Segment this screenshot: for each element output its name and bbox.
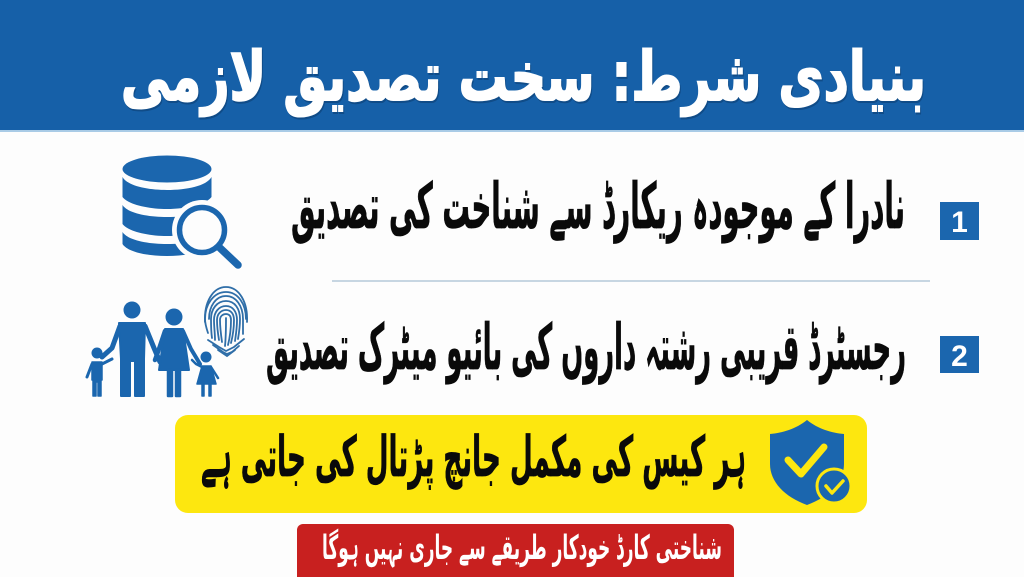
row 1 number badge bbox=[940, 202, 979, 240]
callout text: ہر کیس کی مکمل جانچ پڑتال کی جاتی ہے bbox=[201, 425, 746, 490]
row 2 number badge: 2 bbox=[951, 340, 968, 373]
father bbox=[124, 302, 140, 318]
row 2 number badge bbox=[940, 336, 979, 373]
title: بنیادی شرط: سخت تصدیق لازمی bbox=[121, 39, 926, 117]
icon: database with magnifier bbox=[122, 156, 238, 265]
figures: father, mother, boy, girl bbox=[87, 302, 218, 396]
mother bbox=[166, 308, 182, 326]
icon: fingerprint bbox=[205, 287, 247, 356]
warning: red banner bbox=[297, 524, 734, 577]
row 1 number badge: 1 bbox=[951, 206, 968, 239]
boy bbox=[92, 348, 102, 358]
icon: shield with check bbox=[770, 420, 851, 505]
warning text: شناختی کارڈ خودکار طریقے سے جاری نہیں ہوگا bbox=[322, 528, 722, 568]
header banner bbox=[0, 0, 1024, 132]
girl bbox=[200, 352, 212, 362]
title: بنیادی شرط: سخت تصدیق لازمی bbox=[122, 41, 927, 119]
callout: yellow banner bbox=[175, 415, 867, 513]
icon: family with fingerprint bbox=[87, 287, 247, 396]
